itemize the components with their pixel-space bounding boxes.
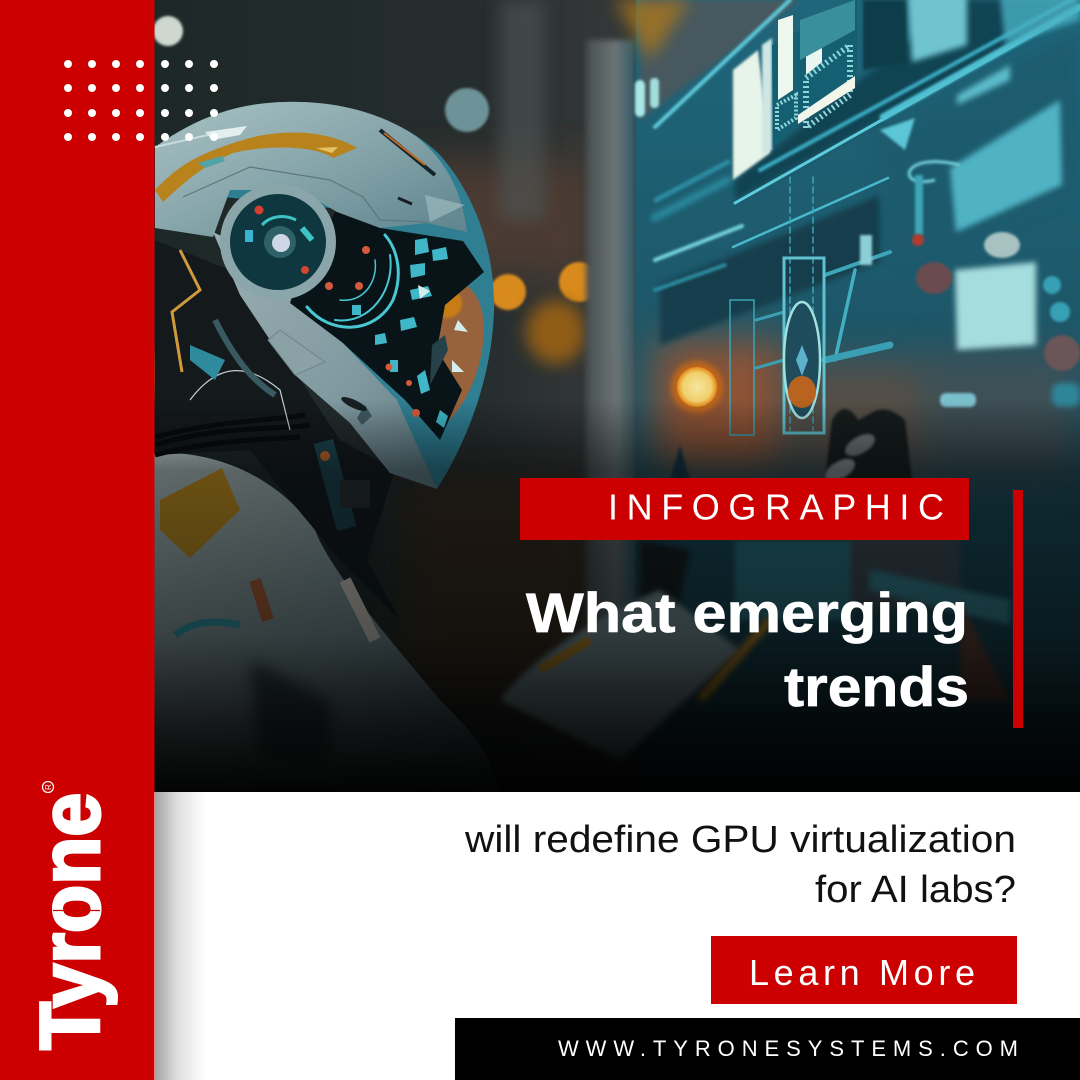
subheading: for AI labs? bbox=[815, 869, 1016, 911]
lower jaw shell bbox=[213, 232, 437, 489]
headline bbox=[526, 581, 969, 718]
infographic tag bbox=[520, 478, 969, 540]
white data windows bbox=[733, 50, 770, 180]
subheading bbox=[464, 819, 1016, 911]
background bokeh lights bbox=[151, 0, 600, 700]
website bar bbox=[455, 1018, 1080, 1080]
learn more button bbox=[711, 936, 1017, 1004]
robot neck wiring bbox=[154, 240, 399, 618]
red sidebar bbox=[0, 0, 154, 1080]
subheading: will redefine GPU virtualization bbox=[464, 819, 1016, 861]
glowing screen lines bbox=[654, 0, 1080, 430]
accent bar bbox=[1013, 490, 1023, 728]
holographic screen panel bbox=[582, 0, 1080, 698]
blurred cyan panels bbox=[863, 0, 907, 70]
orange sun light bbox=[671, 361, 723, 413]
orange helmet stripe bbox=[155, 133, 357, 202]
lower screen structures bbox=[640, 530, 1010, 700]
headline: trends bbox=[784, 655, 969, 718]
website bar: WWW.TYRONESYSTEMS.COM bbox=[558, 1036, 1018, 1061]
photo: robot and holographic screen bbox=[151, 0, 1080, 792]
robot shoulder bbox=[154, 453, 770, 792]
headline: What emerging bbox=[526, 581, 968, 644]
decorative dot grid bbox=[64, 60, 218, 141]
infographic tag: INFOGRAPHIC bbox=[608, 486, 944, 528]
robot helmet bbox=[155, 102, 494, 489]
visor interior electronics bbox=[290, 208, 484, 440]
robot fingers in front of screen bbox=[670, 409, 912, 485]
learn more button: Learn More bbox=[749, 952, 975, 993]
circular lens diagram bbox=[730, 235, 872, 435]
robot eye lens bbox=[220, 184, 336, 300]
upper shell bbox=[155, 102, 467, 237]
helmet glass dome bbox=[155, 102, 494, 489]
tyrone logo: Tyrone bbox=[24, 793, 118, 1050]
shadow beside sidebar bbox=[155, 792, 205, 1080]
tyrone logo: R bbox=[44, 784, 53, 790]
